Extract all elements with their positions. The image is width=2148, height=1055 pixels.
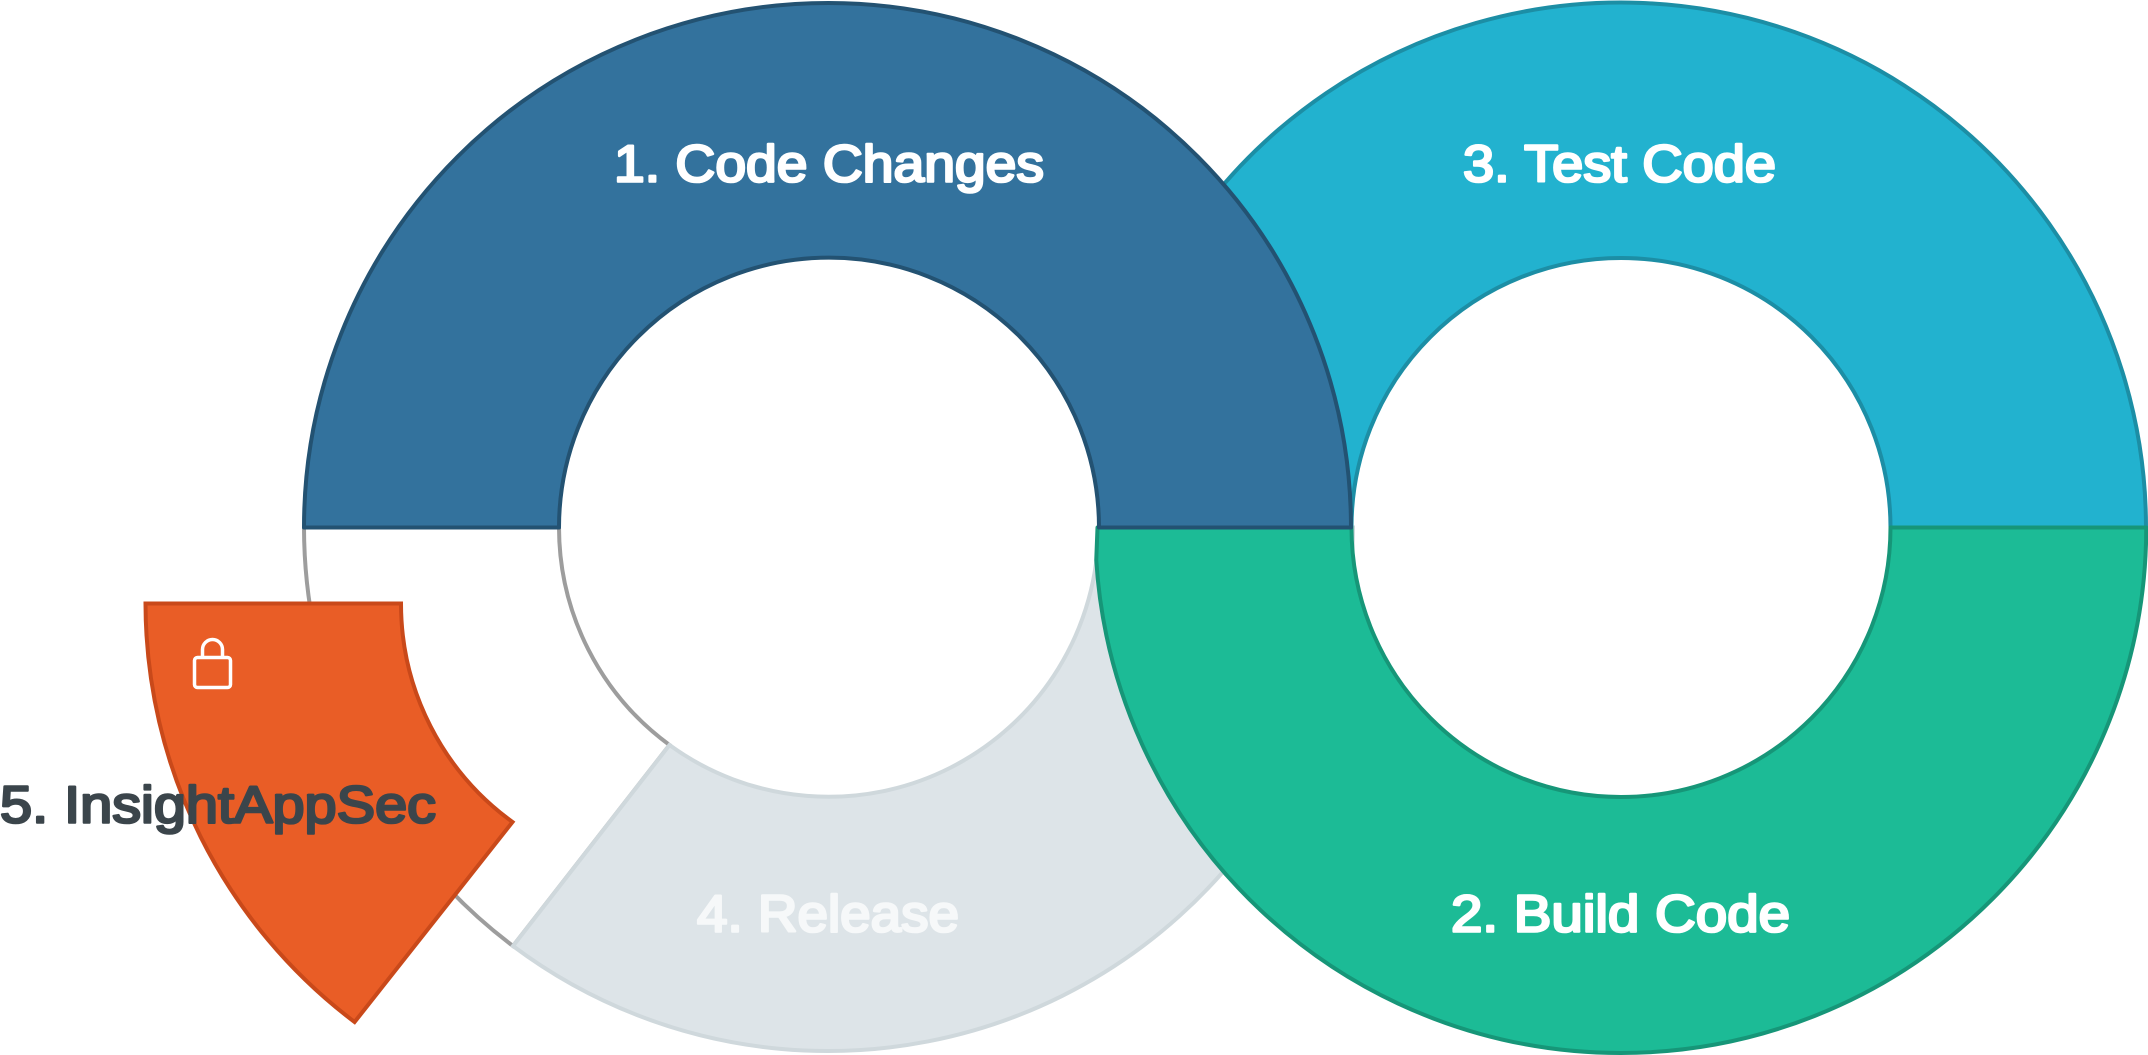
label: 5. InsightAppSec: 5. InsightAppSec <box>0 776 436 834</box>
segment: 5. InsightAppSec (pulled out) <box>146 604 512 1022</box>
label: 3. Test Code: 3. Test Code <box>1463 136 1776 194</box>
segment: 3. Test Code <box>1211 3 2146 527</box>
segment: empty slot outline <box>304 528 670 946</box>
icon: padlock <box>194 640 230 688</box>
label: 1. Code Changes: 1. Code Changes <box>614 136 1044 194</box>
segment: 1. Code Changes <box>304 3 1351 528</box>
segment: 4. Release <box>513 528 1353 1051</box>
label: 2. Build Code: 2. Build Code <box>1451 886 1790 944</box>
label: 4. Release: 4. Release <box>697 886 959 944</box>
segment: 2. Build Code <box>1096 528 2146 1053</box>
